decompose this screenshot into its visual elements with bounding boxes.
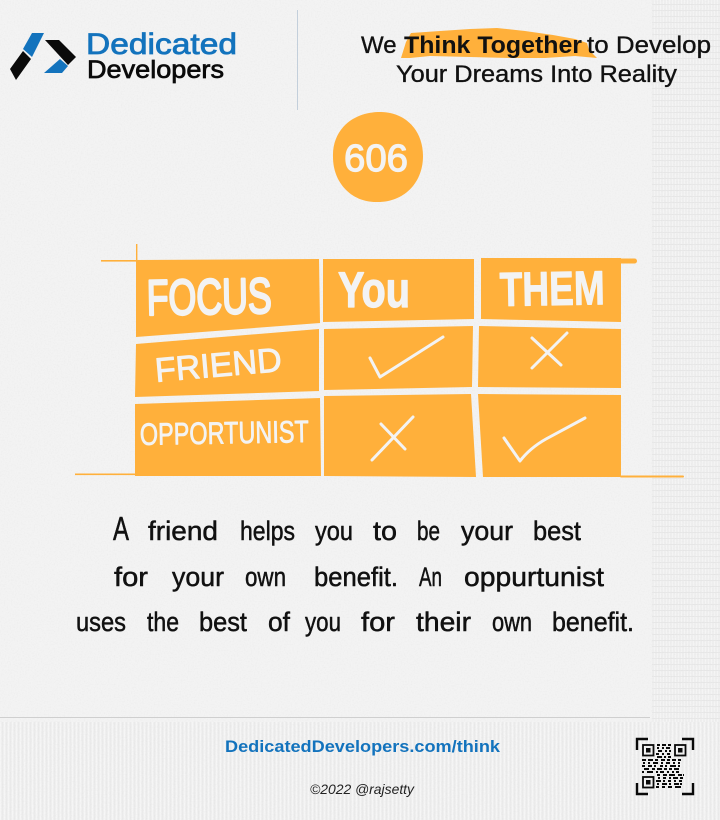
caption line 1: be	[417, 516, 440, 546]
sketch guide lines	[75, 244, 684, 478]
heading: FOCUS: FOCUS	[146, 268, 272, 326]
icon: check, opportunist / them	[504, 418, 585, 461]
copyright: ©2022 @rajsetty	[310, 781, 415, 797]
brush highlight	[401, 28, 597, 58]
caption line 3: benefit.	[552, 607, 634, 637]
caption line 3: you	[305, 607, 341, 637]
caption line 3: uses	[76, 607, 126, 637]
QR finder centres	[646, 748, 682, 784]
caption line 3: their	[416, 607, 471, 637]
handwritten caption	[76, 510, 634, 637]
QR finder squares	[643, 745, 686, 788]
caption line 2: oppurtunist	[464, 562, 605, 592]
tagline emphasis: Think Together: Think Together	[404, 32, 582, 59]
caption line 1: you	[315, 516, 353, 546]
caption line 2: your	[172, 562, 224, 592]
badge number: 606	[344, 138, 408, 180]
caption line 3: of	[268, 607, 290, 637]
row: header cells	[136, 258, 621, 337]
icon: cross, opportunist / you	[372, 417, 413, 460]
caption line 2: An	[419, 562, 442, 592]
QR code	[637, 739, 693, 794]
tagline line 1 end: to Develop	[587, 32, 711, 59]
heading: You: You	[338, 262, 410, 318]
tagline line 2: Your Dreams Into Reality	[396, 61, 677, 88]
heading: THEM: THEM	[499, 262, 605, 317]
row: friend cells	[135, 326, 621, 397]
caption line 3: own	[492, 607, 532, 637]
caption line 1: your	[461, 516, 513, 546]
logo word: Dedicated: Dedicated	[86, 28, 237, 61]
caption line 2: own	[245, 562, 286, 592]
caption line 1: A	[113, 510, 129, 547]
icon: cross, friend / them	[532, 333, 567, 368]
caption line 1: to	[373, 516, 397, 546]
caption line 3: for	[361, 607, 395, 637]
caption line 2: for	[114, 562, 148, 592]
caption line 3: the	[147, 607, 179, 637]
icon: logo mark	[10, 33, 76, 80]
caption line 1: best	[533, 516, 581, 546]
QR corner brackets	[637, 739, 693, 794]
table: Focus / You / Them	[75, 244, 684, 478]
caption line 3: best	[199, 607, 247, 637]
QR data modules	[642, 745, 684, 787]
caption line 2: benefit.	[314, 562, 398, 592]
tagline line 1: We	[361, 32, 397, 59]
icon: check, friend / you	[370, 337, 443, 377]
footer link: DedicatedDevelopers.com/think	[225, 737, 501, 756]
row: opportunist cells	[135, 394, 621, 477]
caption line 1: helps	[240, 516, 295, 546]
caption line 1: friend	[148, 516, 218, 546]
logo word: Developers: Developers	[87, 56, 224, 84]
label: FRIEND: FRIEND	[153, 341, 283, 390]
badge blob	[333, 112, 423, 202]
badge: number 606	[333, 112, 423, 202]
logo: Dedicated Developers	[10, 28, 237, 84]
tagline	[361, 28, 711, 88]
label: OPPORTUNIST: OPPORTUNIST	[140, 414, 309, 452]
